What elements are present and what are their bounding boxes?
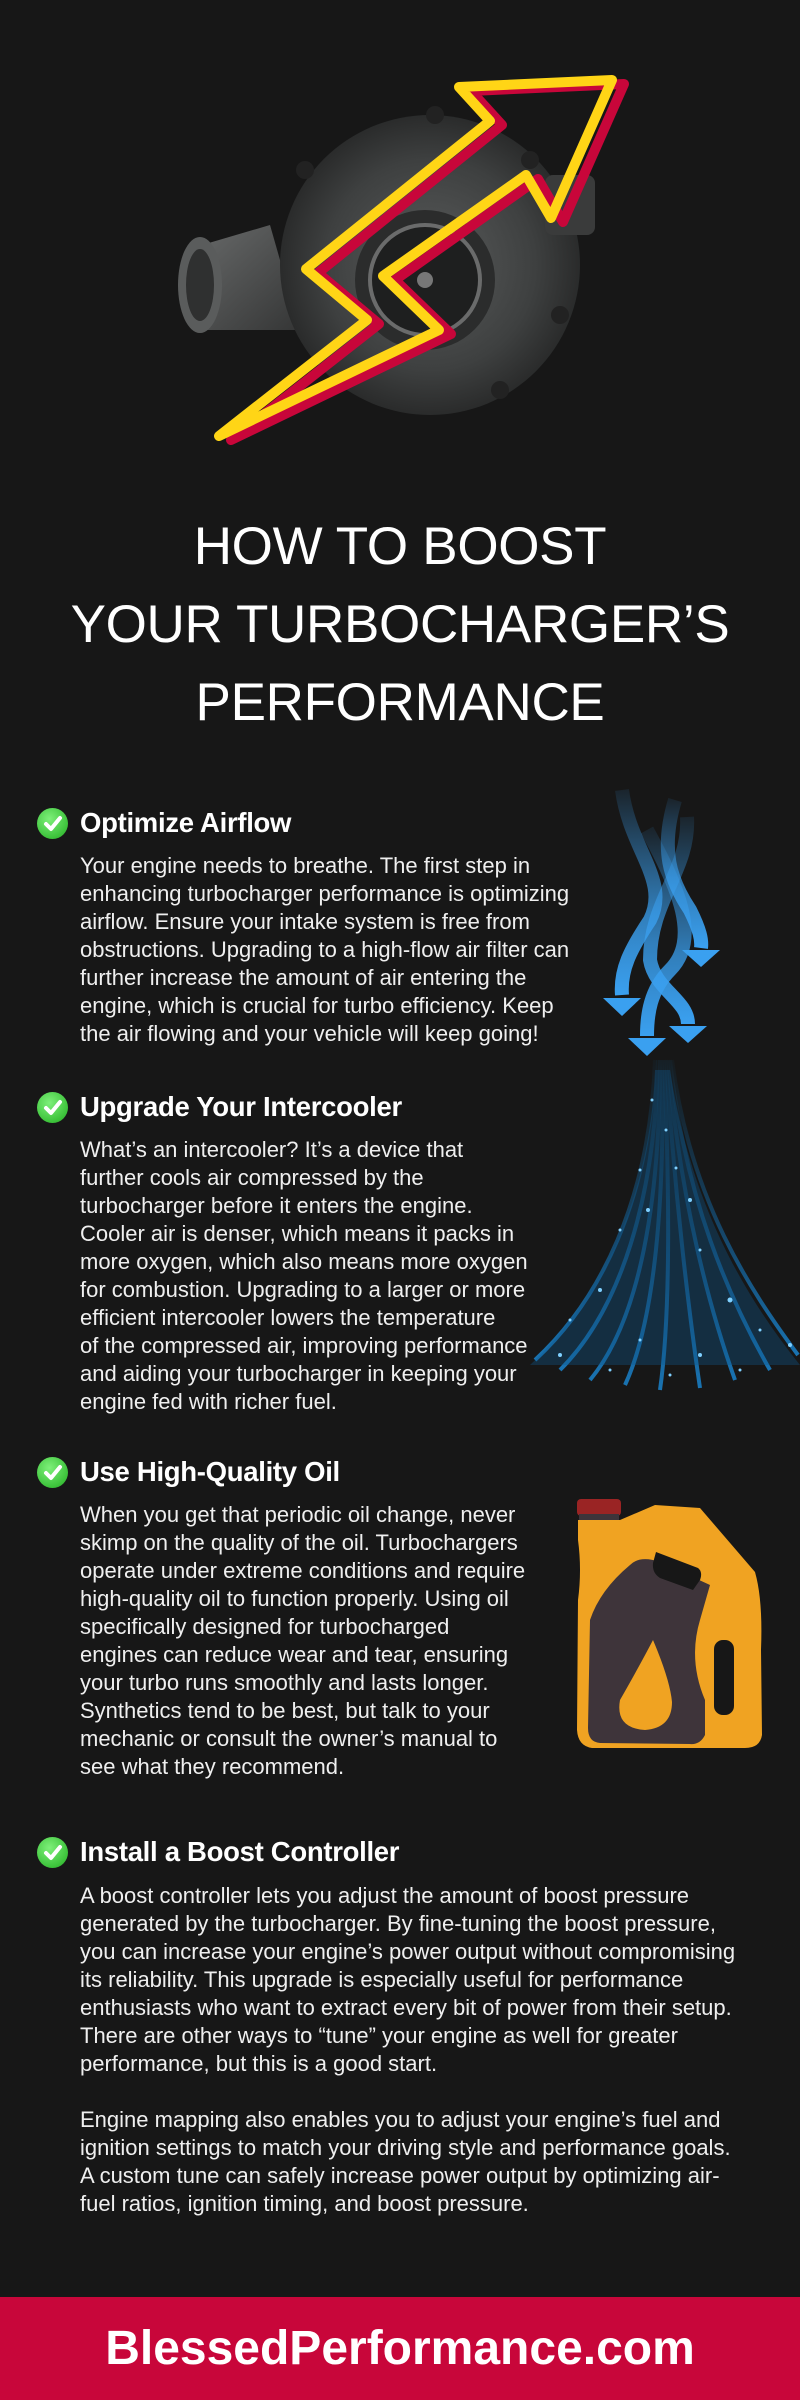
text: engine mapping: Engine mapping also enables you to adjust your engine’s fuel and	[80, 2107, 720, 2132]
text: intercooler: efficient intercooler lowers the temperature	[80, 1305, 495, 1330]
heading: Install a Boost Controller: Install a Boost Controller	[80, 1836, 399, 1867]
title: YOUR TURBOCHARGER’S	[71, 595, 729, 654]
lightning arrow	[219, 80, 624, 440]
title: HOW TO BOOST	[194, 517, 606, 576]
footer banner: BlessedPerformance.com	[105, 2322, 695, 2375]
heading: Use High-Quality Oil: Use High-Quality Oil	[80, 1456, 340, 1487]
text: boost controller: performance, but this is a good start.	[80, 2051, 437, 2076]
text: airflow: airflow. Ensure your intake system is free from	[80, 909, 530, 934]
text: airflow: engine, which is crucial for turbo efficiency. Keep	[80, 993, 554, 1018]
text: boost controller: its reliability. This upgrade is especially useful for performance	[80, 1967, 683, 1992]
text: intercooler: further cools air compressed by the	[80, 1165, 424, 1190]
text: boost controller	[80, 1883, 735, 2076]
text: engine mapping: A custom tune can safely increase power output by optimizing air-	[80, 2163, 720, 2188]
text: oil: operate under extreme conditions and require	[80, 1558, 525, 1583]
heading: Upgrade Your Intercooler: Upgrade Your Intercooler	[80, 1091, 402, 1122]
text: boost controller: There are other ways to “tune” your engine as well for greater	[80, 2023, 678, 2048]
text: oil: When you get that periodic oil change, never	[80, 1502, 515, 1527]
text: boost controller: you can increase your engine’s power output without compromising	[80, 1939, 735, 1964]
turbo body	[178, 106, 595, 415]
text: intercooler: more oxygen, which also means more oxygen	[80, 1249, 528, 1274]
text: intercooler: and aiding your turbocharger in keeping your	[80, 1361, 517, 1386]
text: engine mapping: fuel ratios, ignition timing, and boost pressure.	[80, 2191, 529, 2216]
text: intercooler: Cooler air is denser, which means it packs in	[80, 1221, 514, 1246]
title: PERFORMANCE	[196, 673, 604, 732]
text: airflow: obstructions. Upgrading to a high-flow air filter can	[80, 937, 569, 962]
text: intercooler: What’s an intercooler? It’s a device that	[80, 1137, 463, 1162]
heading: Optimize Airflow: Optimize Airflow	[80, 807, 291, 838]
icon: airflow arrows	[603, 789, 720, 1056]
icon: oil jug	[577, 1499, 762, 1748]
text: intercooler: of the compressed air, improving performance	[80, 1333, 528, 1358]
footer banner	[0, 2297, 800, 2400]
text: airflow: Your engine needs to breathe. The first step in	[80, 853, 530, 878]
text: oil: your turbo runs smoothly and lasts longer.	[80, 1670, 488, 1695]
icon: cool air fountain	[530, 1060, 800, 1390]
text: intercooler	[80, 1137, 528, 1414]
text: engine mapping: ignition settings to match your driving style and performance goals.	[80, 2135, 731, 2160]
title	[71, 517, 729, 732]
text: airflow	[80, 853, 569, 1046]
text: oil: see what they recommend.	[80, 1754, 344, 1779]
text: intercooler: engine fed with richer fuel.	[80, 1389, 337, 1414]
text: oil: mechanic or consult the owner’s manual to	[80, 1726, 497, 1751]
text: oil: specifically designed for turbocharged	[80, 1614, 449, 1639]
hero: turbocharger with lightning arrow	[178, 75, 629, 445]
text: boost controller: A boost controller lets you adjust the amount of boost pressure	[80, 1883, 689, 1908]
text: airflow: enhancing turbocharger performance is optimizing	[80, 881, 569, 906]
text: airflow: further increase the amount of air entering the	[80, 965, 526, 990]
text: oil: skimp on the quality of the oil. Turbochargers	[80, 1530, 518, 1555]
text: boost controller: enthusiasts who want to extract every bit of power from their setup.	[80, 1995, 732, 2020]
text: engine mapping	[80, 2107, 731, 2216]
text: intercooler: for combustion. Upgrading to a larger or more	[80, 1277, 525, 1302]
text: airflow: the air flowing and your vehicle will keep going!	[80, 1021, 539, 1046]
text: intercooler: turbocharger before it enters the engine.	[80, 1193, 473, 1218]
text: oil: Synthetics tend to be best, but talk to your	[80, 1698, 490, 1723]
text: oil: engines can reduce wear and tear, ensuring	[80, 1642, 508, 1667]
text: boost controller: generated by the turbocharger. By fine-tuning the boost pressure,	[80, 1911, 716, 1936]
text: oil	[80, 1502, 525, 1779]
text: oil: high-quality oil to function properly. Using oil	[80, 1586, 509, 1611]
